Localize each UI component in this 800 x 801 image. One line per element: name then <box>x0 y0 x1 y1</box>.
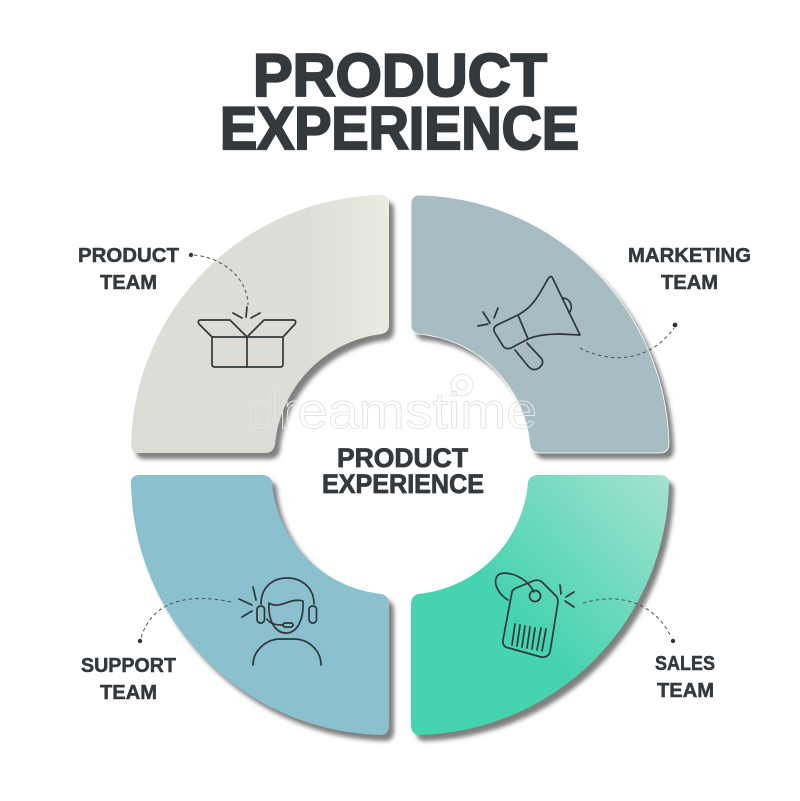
icon: megaphone <box>478 276 580 370</box>
panel: sales team <box>411 475 674 741</box>
label: support team: TEAM <box>100 682 157 704</box>
icon: price tag <box>496 573 574 657</box>
title <box>220 42 579 162</box>
label: product team: TEAM <box>100 272 157 294</box>
callout: support team connector <box>138 598 231 643</box>
callout: marketing team connector <box>580 323 677 358</box>
label: sales team <box>655 653 715 702</box>
label: marketing team <box>628 245 751 294</box>
icon: open box <box>198 307 296 367</box>
center label: EXPERIENCE <box>322 469 484 499</box>
label: support team: SUPPORT <box>81 655 176 677</box>
label: sales team: TEAM <box>657 680 714 702</box>
label: sales team: SALES <box>655 653 715 675</box>
callout: sales team connector <box>583 599 675 643</box>
panel: support team <box>131 475 394 741</box>
center label: PRODUCT <box>337 443 468 473</box>
label: marketing team: MARKETING <box>628 245 751 267</box>
label: marketing team: TEAM <box>661 272 718 294</box>
label: support team <box>81 655 176 704</box>
callout: product team connector <box>189 253 248 305</box>
title: EXPERIENCE <box>220 95 579 162</box>
panel: product team <box>131 195 394 459</box>
panel: marketing team <box>411 195 674 459</box>
center label <box>322 443 484 499</box>
title: PRODUCT <box>253 42 547 109</box>
watermark: dreamstime <box>248 383 537 439</box>
label: product team: PRODUCT <box>78 245 179 267</box>
label: product team <box>78 245 179 294</box>
icon: support headset <box>239 578 321 665</box>
